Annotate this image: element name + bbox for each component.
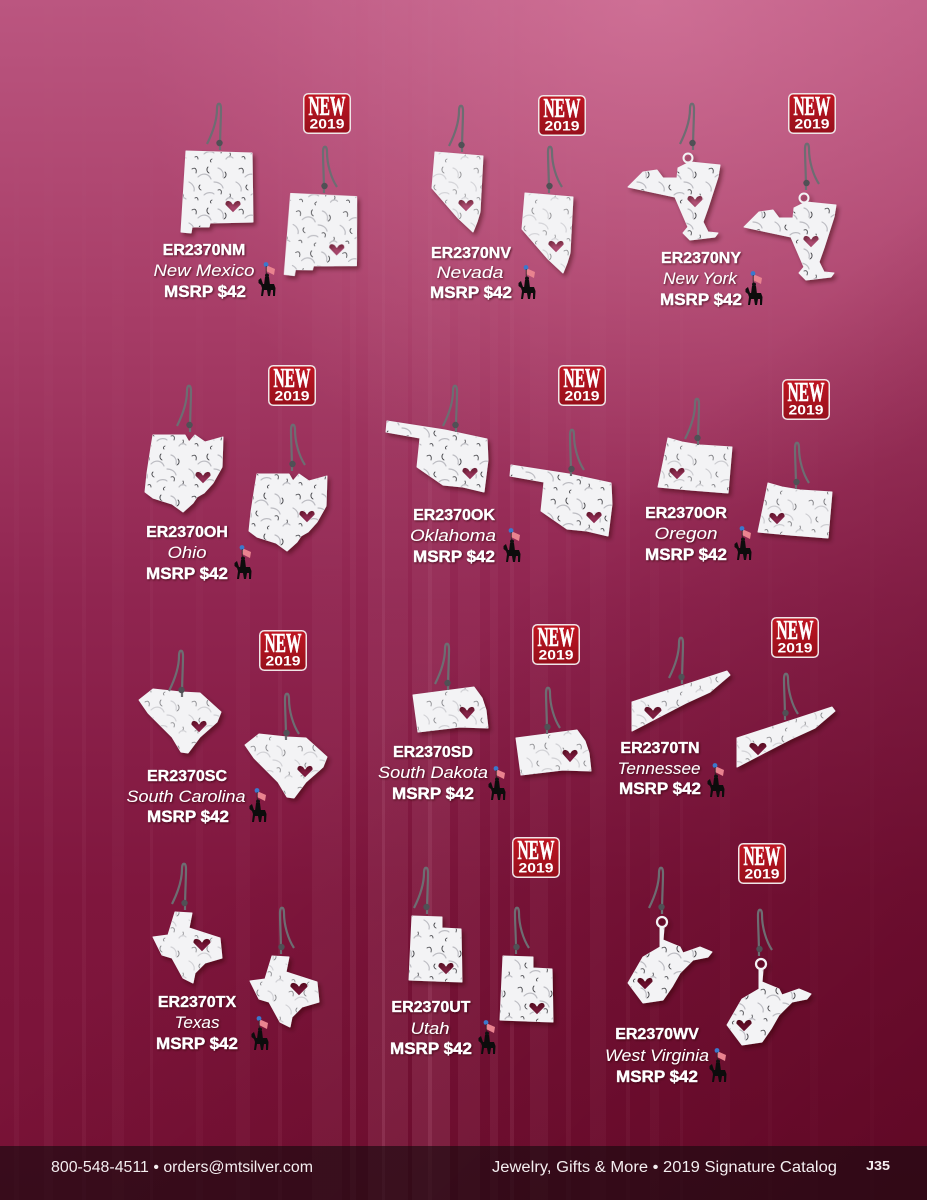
icon: flag rider <box>518 265 536 299</box>
product text: MSRP $42 <box>413 547 495 566</box>
badge: new 2019 <box>783 377 829 419</box>
badge: new 2019 <box>739 841 785 883</box>
product text: ER2370NY <box>661 250 741 267</box>
earring: Texas right <box>250 908 319 1027</box>
earring: South Carolina right <box>245 694 327 798</box>
badge: new 2019: NEW <box>776 615 814 645</box>
badge: new 2019: 2019 <box>274 388 310 404</box>
earring: South Carolina left <box>139 651 221 753</box>
panel: ER2370NY New York <box>628 91 836 309</box>
product text <box>126 768 246 826</box>
earring: New York left <box>628 104 720 240</box>
badge: new 2019: NEW <box>544 93 580 123</box>
product text: MSRP $42 <box>390 1039 472 1058</box>
product text: MSRP $42 <box>147 807 229 826</box>
badge: new 2019 <box>539 93 585 135</box>
badge: new 2019 <box>269 363 315 405</box>
earring: Nevada right <box>522 147 573 273</box>
product text: ER2370OH <box>146 524 228 541</box>
footer catalog title: Jewelry, Gifts & More • 2019 Signature Catalog <box>492 1159 837 1176</box>
product text <box>410 507 496 566</box>
panel: ER2370NM New Mexico <box>154 91 358 301</box>
badge: new 2019 <box>772 615 818 657</box>
footer contact: 800-548-4511 • orders@mtsilver.com <box>51 1159 313 1176</box>
panel: ER2370SD South Dakota <box>378 622 591 803</box>
product text <box>146 524 228 583</box>
icon: flag rider <box>746 271 762 305</box>
product text <box>430 245 512 302</box>
product text: ER2370TN <box>620 740 700 757</box>
earring: Nevada left <box>432 106 483 232</box>
icon: flag rider <box>708 763 724 797</box>
panel: ER2370WV West Virginia <box>605 841 811 1086</box>
badge: new 2019: NEW <box>274 363 310 393</box>
product text: Nevada <box>436 263 504 282</box>
product text: Texas <box>174 1013 220 1032</box>
earring: South Dakota right <box>516 688 591 775</box>
product text: ER2370SD <box>393 744 473 761</box>
product text: ER2370SC <box>147 768 227 785</box>
product text: MSRP $42 <box>392 784 474 803</box>
badge: new 2019 <box>789 91 835 133</box>
product text: New York <box>663 269 739 288</box>
badge: new 2019: 2019 <box>564 388 600 404</box>
badge: new 2019: NEW <box>308 91 346 121</box>
badge: new 2019: 2019 <box>310 116 345 132</box>
badge: new 2019: NEW <box>538 622 574 652</box>
badge: new 2019: NEW <box>564 363 600 393</box>
earring: Ohio left <box>145 386 223 512</box>
badge: new 2019: 2019 <box>518 860 554 876</box>
product text: Oregon <box>654 524 718 543</box>
badge: new 2019 <box>304 91 350 133</box>
badge: new 2019: 2019 <box>794 116 830 132</box>
icon: flag rider <box>258 262 276 296</box>
earring: New Mexico left <box>181 104 253 233</box>
product text: MSRP $42 <box>660 290 742 309</box>
icon: flag rider <box>250 788 266 822</box>
earring: Ohio right <box>249 425 327 551</box>
icon: flag rider <box>478 1020 496 1054</box>
earring: Utah right <box>500 908 553 1022</box>
panel: ER2370OH Ohio <box>145 363 327 583</box>
badge: new 2019: 2019 <box>744 866 780 882</box>
product text: ER2370OR <box>645 505 727 522</box>
product text: ER2370UT <box>391 999 471 1016</box>
product text: ER2370WV <box>615 1026 699 1043</box>
earring: Oregon left <box>658 399 732 493</box>
panel: ER2370TX Texas <box>153 864 319 1053</box>
badge: new 2019: 2019 <box>538 646 574 662</box>
badge: new 2019 <box>260 628 306 670</box>
panel: ER2370TN Tennessee <box>618 615 835 798</box>
badge: new 2019: 2019 <box>788 402 824 418</box>
product text: MSRP $42 <box>156 1034 238 1053</box>
product text <box>378 744 488 803</box>
product text: MSRP $42 <box>164 282 246 301</box>
earring: Oregon right <box>758 443 832 538</box>
badge: new 2019: NEW <box>794 91 830 121</box>
badge: new 2019: NEW <box>264 628 302 658</box>
badge: new 2019: NEW <box>744 841 780 871</box>
product text <box>618 740 701 798</box>
earring: New Mexico right <box>284 147 358 277</box>
icon: flag rider <box>504 528 520 562</box>
product text <box>645 505 727 564</box>
panel: ER2370OR Oregon <box>645 377 832 564</box>
earring: West Virginia left <box>628 868 712 1003</box>
product text <box>660 250 742 309</box>
earring: Texas left <box>153 864 222 983</box>
earring: Oklahoma right <box>510 430 612 536</box>
panel: ER2370NV Nevada <box>430 93 585 302</box>
product text: ER2370TX <box>158 994 236 1011</box>
product text: West Virginia <box>605 1046 709 1065</box>
badge: new 2019 <box>513 835 559 877</box>
product text: South Carolina <box>126 787 246 806</box>
product text: Utah <box>410 1019 450 1038</box>
product text <box>156 994 238 1053</box>
product text: Tennessee <box>618 759 700 778</box>
product text: New Mexico <box>154 261 254 280</box>
icon: flag rider <box>234 545 252 579</box>
icon: flag rider <box>710 1048 726 1082</box>
badge: new 2019 <box>559 363 605 405</box>
panel: ER2370UT Utah <box>390 835 559 1058</box>
earring: Tennessee left <box>632 638 730 731</box>
earring: Oklahoma left <box>386 386 488 492</box>
product text: Ohio <box>168 543 206 562</box>
badge: new 2019: NEW <box>788 377 824 407</box>
badge: new 2019 <box>533 622 579 664</box>
product text: MSRP $42 <box>146 564 228 583</box>
product text <box>390 999 472 1058</box>
earring: South Dakota left <box>413 644 488 732</box>
product text: MSRP $42 <box>616 1067 698 1086</box>
product text: ER2370NM <box>163 242 245 259</box>
product text <box>154 242 254 301</box>
panel: ER2370SC South Carolina <box>126 628 327 826</box>
product text: MSRP $42 <box>645 545 727 564</box>
earring: Tennessee right <box>737 674 835 767</box>
product text: MSRP $42 <box>619 779 701 798</box>
badge: new 2019: NEW <box>518 835 554 865</box>
earring: West Virginia right <box>727 910 811 1045</box>
product text: MSRP $42 <box>430 283 512 302</box>
icon: flag rider <box>488 766 506 800</box>
page number: J35 <box>866 1158 890 1173</box>
badge: new 2019: 2019 <box>544 118 580 134</box>
product text: ER2370OK <box>413 507 495 524</box>
badge: new 2019: 2019 <box>778 640 813 656</box>
product text: ER2370NV <box>431 245 511 262</box>
icon: flag rider <box>734 526 752 560</box>
panel: ER2370OK Oklahoma <box>386 363 612 566</box>
footer bar <box>0 1146 927 1200</box>
earring: Utah left <box>409 868 462 982</box>
product text: Oklahoma <box>410 526 496 545</box>
badge: new 2019: 2019 <box>266 652 301 668</box>
icon: flag rider <box>252 1016 268 1050</box>
product text: South Dakota <box>378 763 488 782</box>
earring: New York right <box>744 144 836 280</box>
product text <box>605 1026 709 1086</box>
